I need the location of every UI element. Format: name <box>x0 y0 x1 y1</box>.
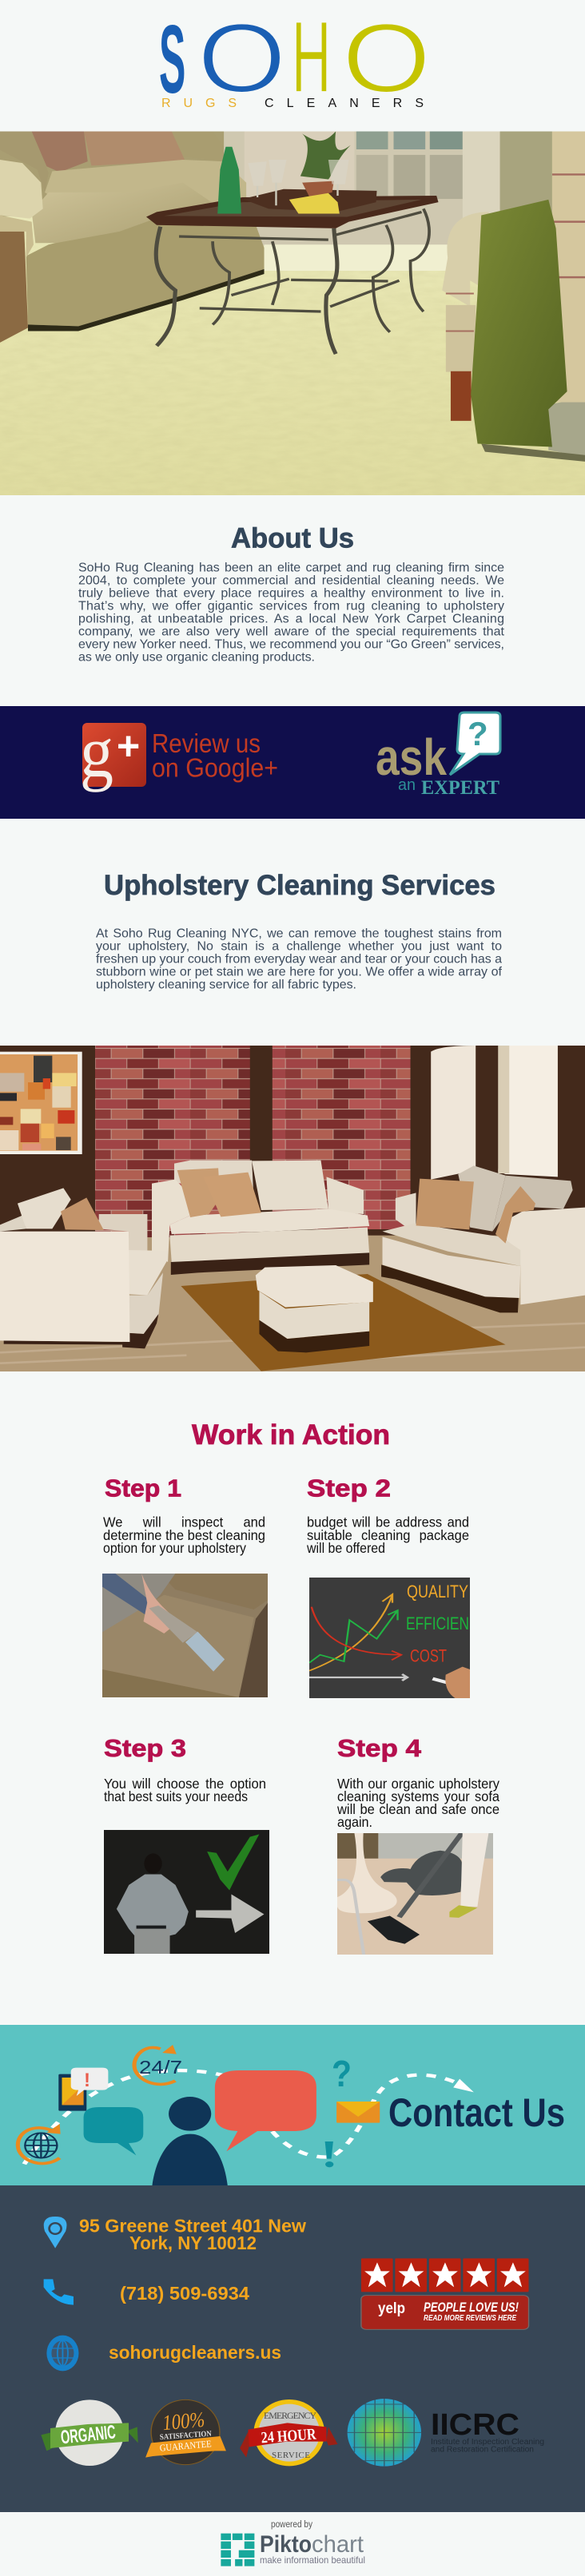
about us paragraph: 2004, to complete your commercial and residential cleaning needs. We <box>78 574 504 588</box>
label: 24/7: 24/7 <box>139 2057 182 2078</box>
logo: ask an expert: ? <box>468 715 488 752</box>
IICRC logotype <box>431 2408 544 2454</box>
dashed path <box>24 2070 456 2164</box>
yelp stars <box>361 2258 529 2292</box>
question mark: ? <box>332 2053 352 2094</box>
navy review band <box>0 706 585 819</box>
badge: 100 percent <box>145 2399 226 2465</box>
yelp button text: PEOPLE LOVE US! <box>424 2300 519 2315</box>
step 2 text: will be offered <box>306 1540 385 1556</box>
badge labels: SERVICE <box>272 2451 310 2460</box>
powered by piktochart <box>260 2520 365 2566</box>
about us paragraph: polishing, at unbeatable prices. As a local New York Carpet Cleaning <box>78 612 504 626</box>
powered by piktochart: powered by <box>271 2520 312 2530</box>
about us paragraph: SoHo Rug Cleaning has been an elite carpet and rug cleaning firm since <box>78 561 504 575</box>
logo: ask an expert: an <box>398 776 416 794</box>
phone <box>58 2074 86 2111</box>
address <box>79 2216 306 2253</box>
photo: chalkboard chart <box>309 1578 470 1698</box>
step 3 <box>104 1734 269 1954</box>
exclamation shape <box>325 2141 333 2159</box>
rug <box>181 1274 506 1371</box>
phone number: (718) 509-6934 <box>120 2283 249 2304</box>
step 1 text: option for your upholstery <box>103 1540 246 1556</box>
photo: chalkboard chart: COST <box>410 1645 447 1666</box>
badge: organic <box>41 2399 138 2466</box>
logo: SoHo Rugs Cleaners: RUGS <box>161 97 237 110</box>
badge labels: EMERGENCY <box>264 2410 316 2421</box>
step 1 <box>102 1475 268 1697</box>
red speech bubble <box>215 2070 316 2151</box>
icon: globe <box>46 2336 79 2371</box>
globe ring <box>18 2047 175 2164</box>
icons and reviews artwork <box>42 2217 529 2566</box>
icon: map pin <box>44 2217 66 2249</box>
teal speech bubble <box>84 2107 143 2155</box>
dark contact panel <box>0 2185 585 2512</box>
logo: SoHo Rugs Cleaners: O <box>197 3 286 113</box>
about us paragraph <box>78 561 505 665</box>
left armchair <box>0 1188 168 1348</box>
icon: phone <box>44 2279 74 2305</box>
step 4 text: again. <box>337 1814 372 1830</box>
step 3 text: You will choose the option <box>104 1776 266 1792</box>
icon: Google+: + <box>117 724 140 768</box>
step 4 text: will be clean and safe once <box>336 1801 499 1817</box>
powered by piktochart: make information beautiful <box>260 2554 365 2566</box>
right sofa <box>381 1165 585 1312</box>
upholstery paragraph <box>96 927 503 992</box>
badge labels: ORGANIC <box>60 2421 117 2448</box>
about us paragraph: company, we are also very well aware of the special requirements that <box>78 625 505 639</box>
label: alert mark: ! <box>84 2070 90 2091</box>
yelp button text: READ MORE REVIEWS HERE <box>424 2313 517 2323</box>
badge: emergency <box>240 2399 337 2466</box>
IICRC logotype: IICRC <box>431 2408 519 2442</box>
photo: cream sofas in brick room <box>0 1046 585 1371</box>
text: Review us on Google+: on Google+ <box>152 752 278 783</box>
step 1 text: We will inspect and <box>103 1514 265 1530</box>
step 3 text: that best suits your needs <box>104 1788 248 1804</box>
step 1 text: determine the best cleaning <box>103 1527 265 1543</box>
IICRC logotype: Institute of Inspection Cleaning <box>431 2438 544 2447</box>
step 2 <box>306 1475 470 1698</box>
badge labels: GUARANTEE <box>159 2438 212 2454</box>
upholstery paragraph: upholstery cleaning service for all fabric types. <box>96 978 356 992</box>
painting <box>0 1052 82 1154</box>
powered by piktochart: chart <box>312 2531 364 2558</box>
logo: ask an expert <box>376 712 500 799</box>
yelp button text: yelp <box>378 2300 405 2317</box>
step 3 heading: Step 3 <box>104 1734 186 1762</box>
step 1 text <box>103 1514 265 1556</box>
about us paragraph: every new Yorker need. Thus, we recommend you our “Go Green” services, <box>78 637 504 652</box>
logo: ask an expert: ask <box>376 728 447 786</box>
icon: Google+: g <box>80 711 113 793</box>
badge labels: 24 HOUR <box>261 2426 317 2447</box>
tray with bottle, glasses and plant <box>217 131 377 213</box>
step 3 text <box>104 1776 266 1804</box>
piktochart icon <box>221 2534 254 2566</box>
photo: chalkboard chart: QUALITY <box>407 1582 468 1602</box>
heading: Work in Action: Work in Action <box>192 1419 390 1451</box>
heading: Upholstery Cleaning Services: Upholstery Cleaning Services <box>104 870 495 901</box>
logo: SoHo Rugs Cleaners: CLEANERS <box>265 97 424 110</box>
arrow head <box>453 2079 474 2092</box>
step 2 text: suitable cleaning package <box>307 1527 469 1543</box>
step 4 <box>336 1734 499 1955</box>
heading: About Us: About Us <box>231 522 354 554</box>
photo: upholstery cleaning wand on sofa <box>102 1574 268 1697</box>
logo: SoHo Rugs Cleaners: H <box>292 2 331 113</box>
step 4 text <box>336 1776 499 1830</box>
iicrc globe <box>348 2399 421 2467</box>
globe icon <box>25 2133 57 2158</box>
yelp button text <box>378 2300 519 2323</box>
step 2 heading: Step 2 <box>307 1475 391 1502</box>
upholstery paragraph: your upholstery, No stain is a challenge whether you just want to <box>96 939 502 954</box>
address: York, NY 10012 <box>129 2233 257 2253</box>
envelope <box>336 2102 380 2123</box>
ottoman <box>256 1265 373 1352</box>
plaid armchair with green throw <box>442 131 585 462</box>
badge labels <box>60 2407 317 2460</box>
logo: SoHo Rugs Cleaners: S <box>159 5 185 113</box>
address: 95 Greene Street 401 New <box>79 2216 306 2237</box>
step 4 text: With our organic upholstery <box>337 1776 499 1792</box>
logo: SoHo Rugs Cleaners <box>159 2 431 113</box>
powered by piktochart: Pikto <box>260 2531 312 2558</box>
text: Review us on Google+: Review us <box>152 728 261 758</box>
windows <box>431 1046 558 1180</box>
badge labels: 100% <box>161 2407 205 2435</box>
coffee table <box>146 196 439 354</box>
center sofa <box>152 1161 369 1275</box>
step 4 heading: Step 4 <box>337 1734 422 1762</box>
logo: SoHo Rugs Cleaners: O <box>342 3 431 113</box>
sofa <box>0 131 265 343</box>
hero photo: living room with carpet <box>0 131 585 495</box>
about us paragraph: as we only use organic cleaning products. <box>78 650 315 665</box>
text: Review us on Google+ <box>152 728 278 783</box>
upholstery paragraph: At Soho Rug Cleaning NYC, we can remove the toughest stains from <box>96 927 502 941</box>
contact us banner <box>0 2025 585 2185</box>
website: sohorugcleaners.us <box>109 2342 281 2363</box>
icon: Google+ <box>80 711 146 793</box>
step 2 text: budget will be address and <box>307 1514 469 1530</box>
upholstery paragraph: freshen up your couch from everyday wear and tear or your couch has a <box>96 952 502 966</box>
logo: ask an expert: EXPERT <box>421 777 499 799</box>
person <box>152 2097 228 2185</box>
alert bubble <box>71 2068 108 2096</box>
badge labels: SATISFACTION <box>160 2430 213 2442</box>
yelp button <box>361 2296 529 2329</box>
upholstery paragraph: stubborn wine or pet stain we are here for you. We offer a wide array of <box>96 965 503 979</box>
IICRC logotype: and Restoration Certification <box>431 2446 534 2454</box>
photo: vacuum cleaner on tiled floor <box>337 1833 493 1955</box>
step 2 text <box>306 1514 469 1556</box>
photo: chalkboard chart: EFFICIEN <box>406 1613 469 1633</box>
step 4 text: cleaning systems your sofa <box>337 1788 499 1804</box>
about us paragraph: That’s why, we offer gigantic services from rug cleaning to upholstery <box>78 599 504 613</box>
step 1 heading: Step 1 <box>105 1475 181 1502</box>
about us paragraph: truly believe that every place requires a healthy environment to live in. <box>78 586 504 601</box>
photo: man facing chalk check and arrow <box>104 1830 269 1954</box>
